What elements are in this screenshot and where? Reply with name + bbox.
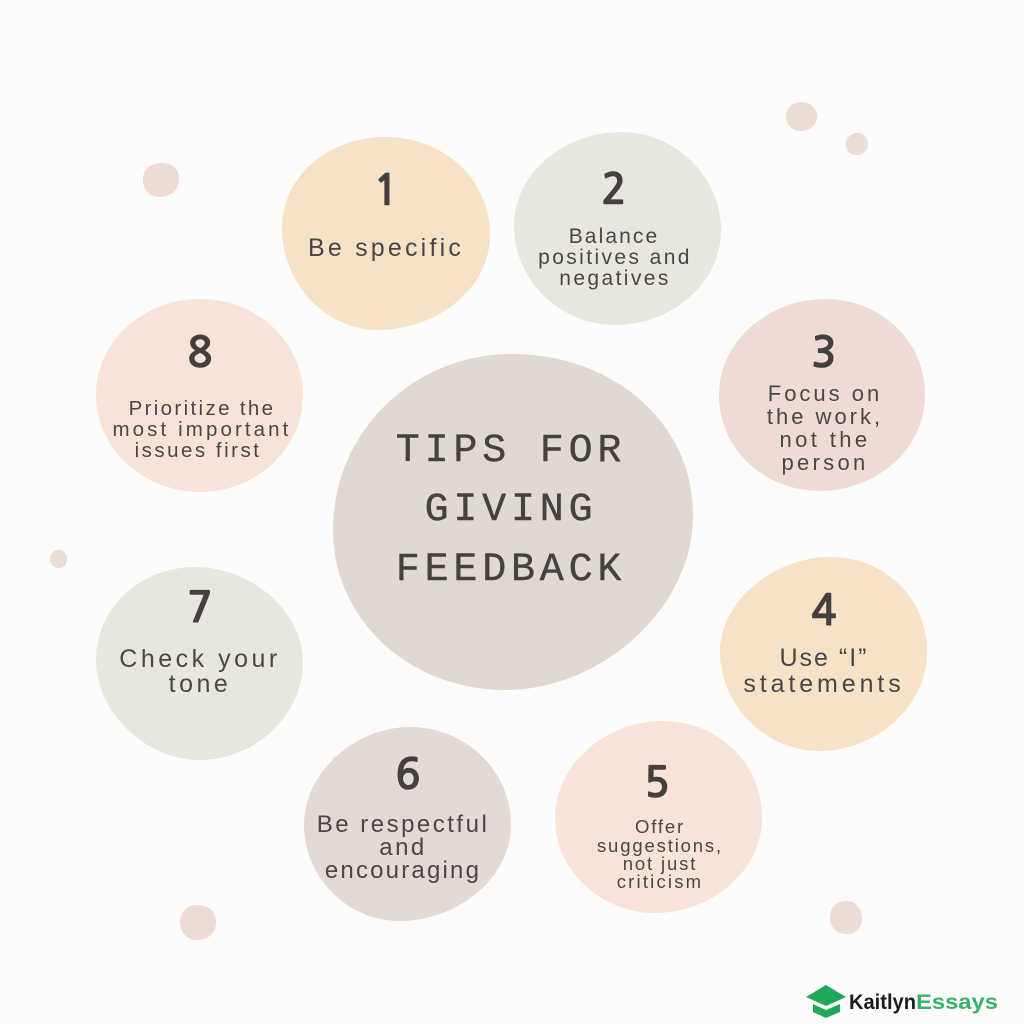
panel: tip 5: criticism: [617, 871, 703, 892]
panel: tip 4: statements: [743, 670, 905, 698]
panel: tip 6: and: [379, 834, 427, 861]
panel: tip 4: [720, 557, 927, 751]
panel: tip 6: 6: [395, 755, 421, 796]
panel: tip 3: 3: [811, 333, 837, 374]
panel: tip 1: [282, 137, 490, 330]
panel: tip 6: Be respectful: [317, 811, 489, 838]
panel: tip 2: Balance: [569, 225, 659, 248]
panel: tip 6: [304, 727, 511, 921]
panel: tip 7: tone: [169, 670, 231, 698]
panel: tip 5: 5: [644, 763, 670, 804]
panel: tip 2: 2: [601, 170, 627, 211]
panel: tip 5: not just: [623, 853, 697, 874]
panel: tip 7: 7: [187, 588, 213, 629]
logo: Kaitlyn: [849, 990, 916, 1014]
panel: tip 3: Focus on: [768, 381, 882, 406]
panel: tip 5: Offer: [635, 816, 685, 837]
panel: tip 7: Check your: [119, 645, 281, 673]
panel: tip 2: negatives: [559, 267, 671, 290]
panel: tip 3: person: [781, 450, 869, 475]
panel: tip 8: Prioritize the: [129, 397, 275, 420]
panel: tip 8: most important: [113, 418, 291, 441]
icon: graduation cap: [806, 985, 846, 1018]
panel: tip 7: [96, 567, 303, 760]
title line 3: FEEDBACK: [396, 548, 626, 593]
panel: tip 4: 4: [811, 591, 837, 632]
decorative dots: [50, 102, 868, 940]
panel: tip 6: encouraging: [325, 857, 481, 884]
logo: Essays: [916, 990, 998, 1014]
panel: tip 1: 1: [373, 171, 399, 212]
panel: tip 2: positives and: [538, 246, 692, 269]
panel: centre title: [333, 354, 693, 690]
panel: tip 8: [96, 299, 303, 492]
panel: tip 3: the work,: [767, 404, 883, 429]
panel: tip 5: [555, 721, 762, 913]
title: TIPS FOR: [396, 429, 626, 474]
panel: tip 8: issues first: [135, 439, 261, 462]
panel: tip 8: 8: [187, 333, 213, 374]
title line 2: GIVING: [425, 488, 597, 533]
panel: tip 5: suggestions,: [597, 835, 723, 856]
panel: tip 4: Use “I”: [780, 644, 868, 672]
panel: tip 2: [514, 132, 721, 325]
panel: tip 3: not the: [779, 427, 871, 452]
panel: tip 3: [719, 299, 925, 491]
logo: [806, 985, 998, 1018]
panel: tip 1: Be specific: [308, 234, 464, 262]
